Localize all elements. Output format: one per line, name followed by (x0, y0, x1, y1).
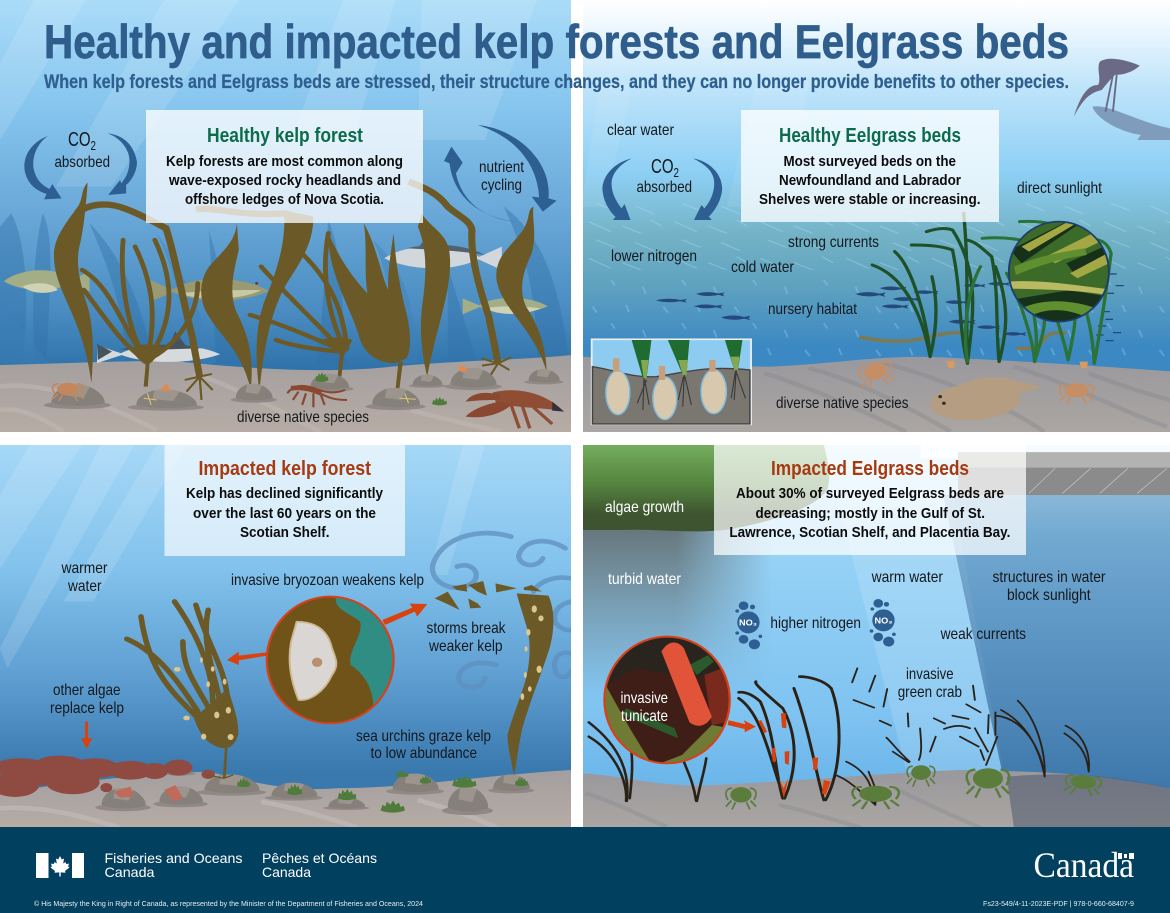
label: clear water: clear water (607, 122, 675, 139)
holdfast fronds (185, 357, 511, 400)
tall bitten kelp (507, 593, 553, 775)
label: nutrient cycling: cycling (481, 177, 522, 194)
label: storms break weaker kelp: weaker kelp (428, 638, 503, 655)
description: healthy kelp forest: wave-exposed rocky headlands and (168, 172, 401, 189)
background kelp silhouettes (0, 207, 564, 332)
description: impacted eelgrass: About 30% of surveyed Eelgrass beds are (736, 485, 1004, 502)
label: nutrient cycling: nutrient (479, 159, 524, 176)
fish: cod centre (149, 279, 269, 302)
label: other algae replace kelp: replace kelp (50, 700, 124, 717)
fish: cod lower right (463, 298, 548, 314)
broken kelp pieces (435, 581, 542, 610)
CO2 arrows (602, 158, 722, 220)
label: NO3 left: NO₃ (739, 618, 757, 628)
CO2 arrows (24, 133, 137, 199)
arched strap kelp left (76, 205, 200, 377)
tiny fish right (1096, 274, 1124, 341)
green crabs (726, 765, 1102, 809)
sunlight rays (0, 445, 485, 668)
kelp fronds (54, 182, 547, 400)
seabed ripples (764, 363, 1170, 432)
inset: rhizome and seed cross-section (592, 339, 751, 424)
label: diverse native species: diverse native species (237, 409, 369, 426)
water background (583, 12, 1170, 372)
floating eelgrass fragments (852, 668, 995, 752)
department name: French: Canada (262, 864, 311, 880)
heading: healthy kelp forest: Healthy kelp forest (207, 125, 363, 147)
red arrow to tunicate (728, 720, 756, 732)
heading: impacted kelp forest: Impacted kelp forest (198, 458, 371, 480)
labels: impacted kelp forest (50, 560, 506, 762)
red arrows (81, 604, 427, 749)
eels (859, 333, 1066, 349)
label: direct sunlight: direct sunlight (1017, 180, 1102, 197)
label: strong currents: strong currents (788, 234, 879, 251)
flounder (928, 377, 1042, 423)
sunlight rays (0, 0, 537, 187)
light rays (583, 174, 741, 206)
label: CO2: 2 (674, 165, 679, 180)
labels: healthy kelp forest (54, 129, 524, 426)
seabed ripples (0, 800, 496, 828)
rocks (95, 764, 534, 815)
label: structures block sunlight: block sunlight (1007, 587, 1091, 604)
label: structures block sunlight: structures in water (992, 569, 1106, 586)
strap under box (196, 182, 498, 363)
panel: healthy kelp forest (0, 0, 575, 433)
tall blade centre left (201, 223, 252, 390)
crab on rock (52, 383, 84, 401)
label: NO3 right: NO₃ (874, 616, 893, 626)
labels: impacted eelgrass (605, 499, 1106, 725)
logo: Canadian flag signature (36, 853, 84, 878)
light beam (824, 445, 1014, 828)
labels: healthy eelgrass (607, 122, 1102, 412)
heron (1074, 59, 1170, 140)
seabed ripples (0, 372, 448, 418)
copyright: © His Majesty the King in Right of Canada, as represented by the Minister of the Department of Fisheries and Oceans, 2024 (34, 899, 423, 908)
panel: impacted eelgrass beds (581, 445, 1170, 828)
label: storms break weaker kelp: storms break (426, 620, 506, 637)
turbid water (581, 528, 772, 695)
catalogue number: Fs23-549/4-11-2023E-PDF | 978-0-660-68407-9 (983, 899, 1134, 908)
text box: healthy kelp forest (146, 110, 423, 223)
label: CO2: CO (651, 156, 681, 178)
small fish school left (656, 292, 751, 320)
description: healthy kelp forest: offshore ledges of Nova Scotia. (185, 191, 384, 208)
fan kelp left (82, 240, 198, 387)
label: absorbed: absorbed (54, 154, 110, 171)
seabed (0, 770, 575, 828)
blade far left (54, 183, 93, 383)
fish: cod left (4, 270, 90, 293)
blade far right (496, 207, 547, 372)
department name: French: Pêches et Océans (262, 850, 377, 866)
label: sea urchins: to low abundance (370, 745, 477, 762)
rocks (44, 368, 563, 411)
nitrate bubbles (735, 599, 896, 649)
green urchin tufts (237, 770, 528, 813)
label: CO2: 2 (91, 138, 96, 153)
seabed (0, 355, 575, 433)
other algae: red turf (0, 756, 215, 797)
description: healthy eelgrass: Shelves were stable or increasing. (759, 191, 980, 208)
department name: English: Fisheries and Oceans (104, 850, 242, 866)
footer band (0, 827, 1170, 913)
label: absorbed: absorbed (636, 179, 692, 196)
seabed ripples (585, 788, 980, 828)
label: other algae replace kelp: other algae (53, 682, 121, 699)
label: warmer water: warmer (61, 560, 108, 577)
tall blade centre (257, 210, 313, 392)
nutrient cycling arrows (444, 125, 557, 222)
description: healthy eelgrass: Most surveyed beds on the (784, 153, 956, 170)
crabs (858, 359, 1094, 404)
fish: hake lower left (97, 332, 220, 363)
label: diverse native species: diverse native species (776, 395, 908, 412)
red algae on rocks (114, 785, 183, 802)
water background (0, 0, 571, 370)
label: warm water: warm water (871, 569, 944, 586)
label: higher nitrogen: higher nitrogen (770, 615, 861, 632)
label: cold water: cold water (731, 259, 795, 276)
seabed shadow (1007, 774, 1170, 828)
panel: impacted kelp forest (0, 445, 575, 828)
description: impacted eelgrass: decreasing; mostly in the Gulf of St. (756, 505, 985, 522)
photo inset: eelgrass closeup (1008, 220, 1111, 323)
description: impacted eelgrass: Lawrence, Scotian Shelf, and Placentia Bay. (729, 524, 1010, 541)
surface current streaks (581, 197, 1170, 270)
description: impacted kelp forest: Kelp has declined significantly (186, 485, 384, 502)
fish: hake upper right (384, 242, 502, 268)
seabed (581, 357, 1170, 433)
small lobster (287, 386, 347, 407)
tunicates on eelgrass (758, 713, 830, 798)
panel: healthy eelgrass beds (581, 0, 1170, 433)
text box: impacted kelp forest (164, 445, 405, 556)
wordmark: Canada: Canada (1034, 845, 1134, 885)
label: CO2: CO (68, 129, 98, 151)
label: algae growth: algae growth (605, 499, 684, 516)
label: sea urchins: sea urchins graze kelp (356, 728, 491, 745)
lower water ticks (592, 280, 1165, 356)
label: invasive tunicate: tunicate (621, 708, 668, 725)
eelgrass: impacted plants (589, 677, 1089, 805)
small fish school right (855, 282, 1026, 336)
label: warmer water: water (67, 578, 102, 595)
photo inset: bryozoan (267, 597, 395, 723)
label: weak currents: weak currents (940, 626, 1026, 643)
large lobster (466, 390, 564, 428)
description: impacted kelp forest: Scotian Shelf. (240, 524, 330, 541)
text box: healthy eelgrass (741, 110, 999, 222)
label: invasive green crab: invasive (906, 666, 954, 683)
label: invasive bryozoan: invasive bryozoan weakens kelp (231, 572, 424, 589)
bryozoan spots on kelp (174, 657, 234, 740)
label: lower nitrogen: lower nitrogen (611, 248, 697, 265)
description: healthy eelgrass: Newfoundland and Labrador (779, 172, 961, 189)
blade right of centre (418, 213, 450, 377)
algae growth layer (581, 445, 829, 531)
seabed (581, 770, 1170, 828)
label: invasive green crab: green crab (898, 684, 962, 701)
photo inset: tunicate (600, 635, 731, 765)
white surface fade (921, 445, 1170, 458)
eelgrass plants (872, 213, 1111, 363)
label: nursery habitat: nursery habitat (768, 301, 857, 318)
water background (581, 445, 1170, 828)
fan kelp centre (250, 233, 353, 377)
description: impacted kelp forest: over the last 60 years on the (193, 505, 376, 522)
label: invasive tunicate: invasive (620, 690, 668, 707)
small shells (946, 361, 1088, 368)
water background (0, 445, 575, 828)
storm swirls (432, 533, 571, 687)
heading: healthy eelgrass: Healthy Eelgrass beds (779, 125, 961, 147)
label: turbid water: turbid water (608, 571, 682, 588)
palm kelp right of centre (328, 223, 410, 390)
text box: impacted eelgrass (714, 445, 1026, 555)
shaded water under structures (943, 495, 1170, 828)
description: healthy kelp forest: Kelp forests are most common along (166, 153, 403, 170)
department name: English: Canada (104, 864, 155, 880)
dock structure (958, 452, 1170, 495)
green tufts and small shells (144, 365, 468, 405)
weakened kelp plant (127, 602, 238, 778)
heading: impacted eelgrass: Impacted Eelgrass beds (771, 458, 969, 480)
